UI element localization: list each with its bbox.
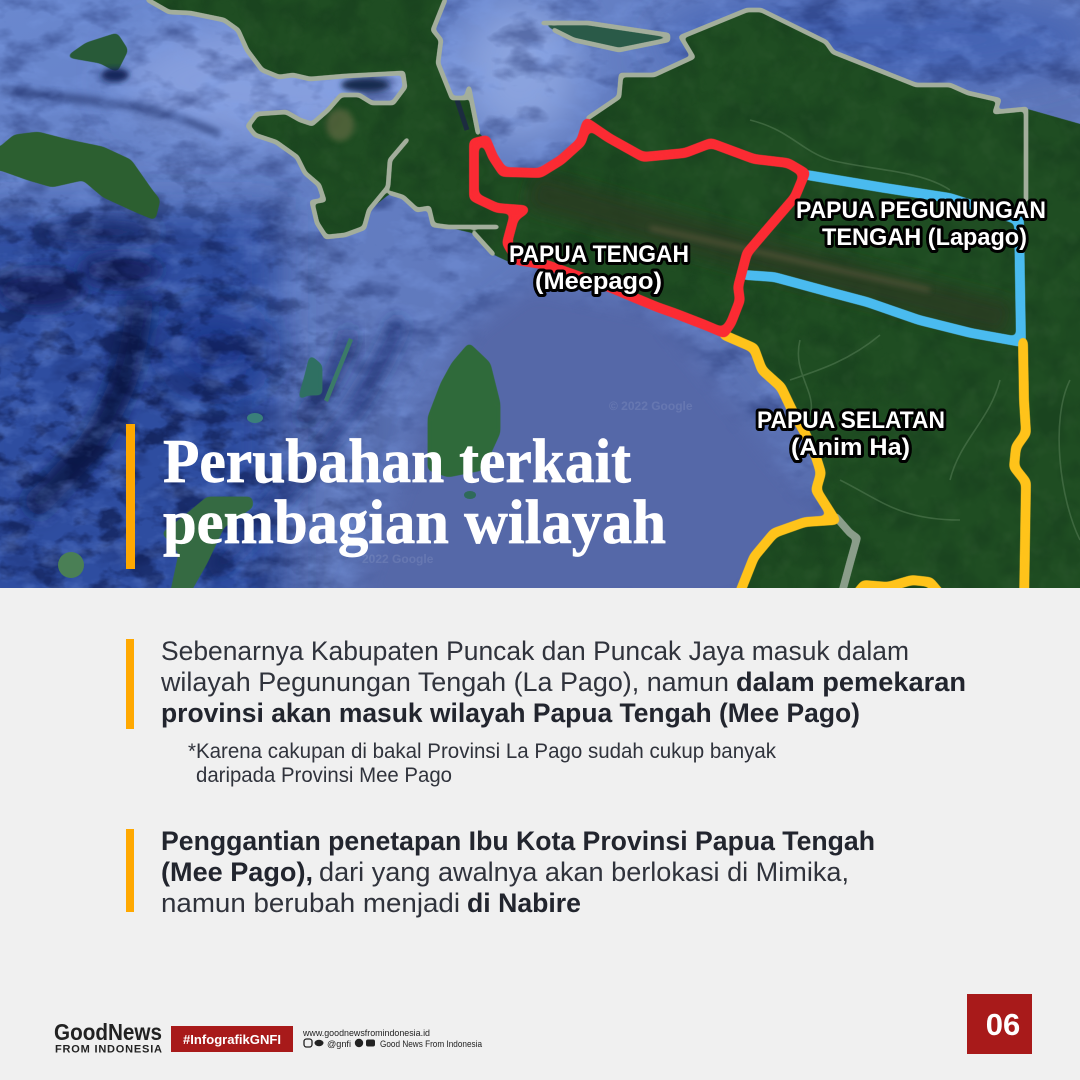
label: Papua Selatan: (Anim Ha) xyxy=(791,434,910,461)
route: Papua Pegunungan Tengah border (blue) xyxy=(745,175,1021,342)
footer website and social: Good News From Indonesia xyxy=(380,1039,483,1050)
paragraph 2: namun berubah menjadi xyxy=(161,888,460,918)
label: Papua Selatan xyxy=(757,407,945,461)
map watermarks: © 2022 Google xyxy=(609,399,693,413)
page number badge: 06 xyxy=(986,1007,1020,1042)
hashtag badge: #InfografikGNFI xyxy=(183,1032,281,1047)
paragraph 1: Sebenarnya Kabupaten Puncak dan Puncak Jaya masuk dalam xyxy=(161,636,909,666)
hashtag badge xyxy=(171,1026,293,1052)
icon: twitter xyxy=(314,1040,324,1046)
paragraph 2: di Nabire xyxy=(467,888,581,918)
footer logo: GoodNews From Indonesia: FROM INDONESIA xyxy=(55,1044,162,1056)
icon: instagram xyxy=(304,1039,312,1047)
footer website and social: @gnfi xyxy=(327,1039,351,1049)
coastline outlines xyxy=(148,0,1026,600)
paragraph 2 accent bar xyxy=(126,829,134,912)
paragraph 1: wilayah Pegunungan Tengah (La Pago), namun xyxy=(160,667,729,697)
label: Papua Tengah xyxy=(509,241,689,295)
paragraph 2 xyxy=(161,826,875,918)
label: Papua Pegunungan Tengah xyxy=(796,197,1046,251)
footer website and social: www.goodnewsfromindonesia.id xyxy=(302,1028,430,1039)
paragraph 1 accent bar xyxy=(126,639,134,729)
footer logo: GoodNews From Indonesia xyxy=(54,1019,162,1056)
paragraph 2: Penggantian penetapan Ibu Kota Provinsi Papua Tengah xyxy=(161,826,875,856)
islands xyxy=(0,23,668,600)
footer website and social xyxy=(302,1028,483,1050)
icon: facebook xyxy=(355,1039,363,1047)
route: Papua Tengah border (red) xyxy=(474,123,805,333)
label: Papua Tengah: PAPUA TENGAH xyxy=(509,241,689,268)
map watermarks: 2022 Google xyxy=(362,552,434,566)
landmass: New Guinea xyxy=(152,0,1080,588)
paragraph 1: provinsi akan masuk wilayah Papua Tengah (Mee Pago) xyxy=(161,698,860,728)
icon: youtube xyxy=(366,1040,375,1046)
title xyxy=(163,428,666,557)
label: Papua Pegunungan Tengah: PAPUA PEGUNUNGAN xyxy=(796,197,1046,224)
ocean shading xyxy=(0,0,1080,630)
map panel xyxy=(0,0,1080,630)
footnote: *Karena cakupan di bakal Provinsi La Pago sudah cukup banyak xyxy=(188,740,776,763)
paragraph 2: dari yang awalnya akan berlokasi di Mimika, xyxy=(319,857,849,887)
footer logo: GoodNews From Indonesia: GoodNews xyxy=(54,1019,162,1045)
paragraph 1: dalam pemekaran xyxy=(736,667,966,697)
footnote: daripada Provinsi Mee Pago xyxy=(196,764,452,787)
paragraph 1 xyxy=(160,636,966,728)
label: Papua Tengah: (Meepago) xyxy=(535,268,662,295)
route: Papua Selatan border (yellow) xyxy=(724,335,1026,605)
page number badge xyxy=(967,994,1032,1054)
label: Papua Selatan: PAPUA SELATAN xyxy=(757,407,945,434)
title: Perubahan terkait xyxy=(163,428,631,496)
footnote xyxy=(188,740,776,787)
title accent bar xyxy=(126,424,135,569)
paragraph 2: (Mee Pago), xyxy=(161,857,313,887)
label: Papua Pegunungan Tengah: TENGAH (Lapago) xyxy=(822,224,1027,251)
title: pembagian wilayah xyxy=(163,489,666,557)
map watermarks xyxy=(362,399,693,566)
